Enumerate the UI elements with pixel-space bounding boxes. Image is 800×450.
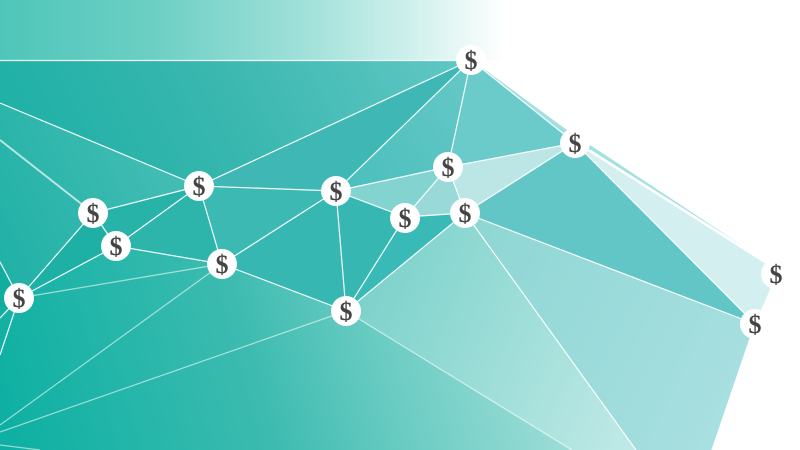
dollar node: center right <box>450 198 480 228</box>
dollar node: center left <box>321 176 351 206</box>
dollar node: far right: $ <box>770 260 782 289</box>
dollar node: left middle: $ <box>86 199 100 228</box>
dollar node: bottom center <box>331 296 361 326</box>
dollar node: far left <box>4 283 34 313</box>
dollar node: center: $ <box>398 204 412 233</box>
dollar node: left lower <box>101 231 131 261</box>
dollar node: upper right: $ <box>568 129 582 158</box>
dollar node: bottom center: $ <box>340 297 352 326</box>
dollar node: lower right <box>740 309 770 339</box>
dollar node: center <box>390 203 420 233</box>
dollar node: left upper: $ <box>192 172 206 201</box>
dollar node: lower right: $ <box>748 310 762 339</box>
dollar node: left lower: $ <box>110 232 122 261</box>
dollar node: top: $ <box>464 46 478 75</box>
dollar node: middle lower <box>207 249 237 279</box>
dollar node: top <box>456 45 486 75</box>
dollar node: center upper <box>433 152 463 182</box>
dollar node: middle lower: $ <box>216 250 228 279</box>
dollar node: left middle <box>78 198 108 228</box>
dollar node: center upper: $ <box>442 153 454 182</box>
dollar node: center right: $ <box>458 199 472 228</box>
dollar node: upper right <box>560 128 590 158</box>
dollar node: center left: $ <box>330 177 342 206</box>
dollar node: far left: $ <box>12 284 26 313</box>
dollar node: left upper <box>184 171 214 201</box>
dollar node: far right <box>761 259 791 289</box>
